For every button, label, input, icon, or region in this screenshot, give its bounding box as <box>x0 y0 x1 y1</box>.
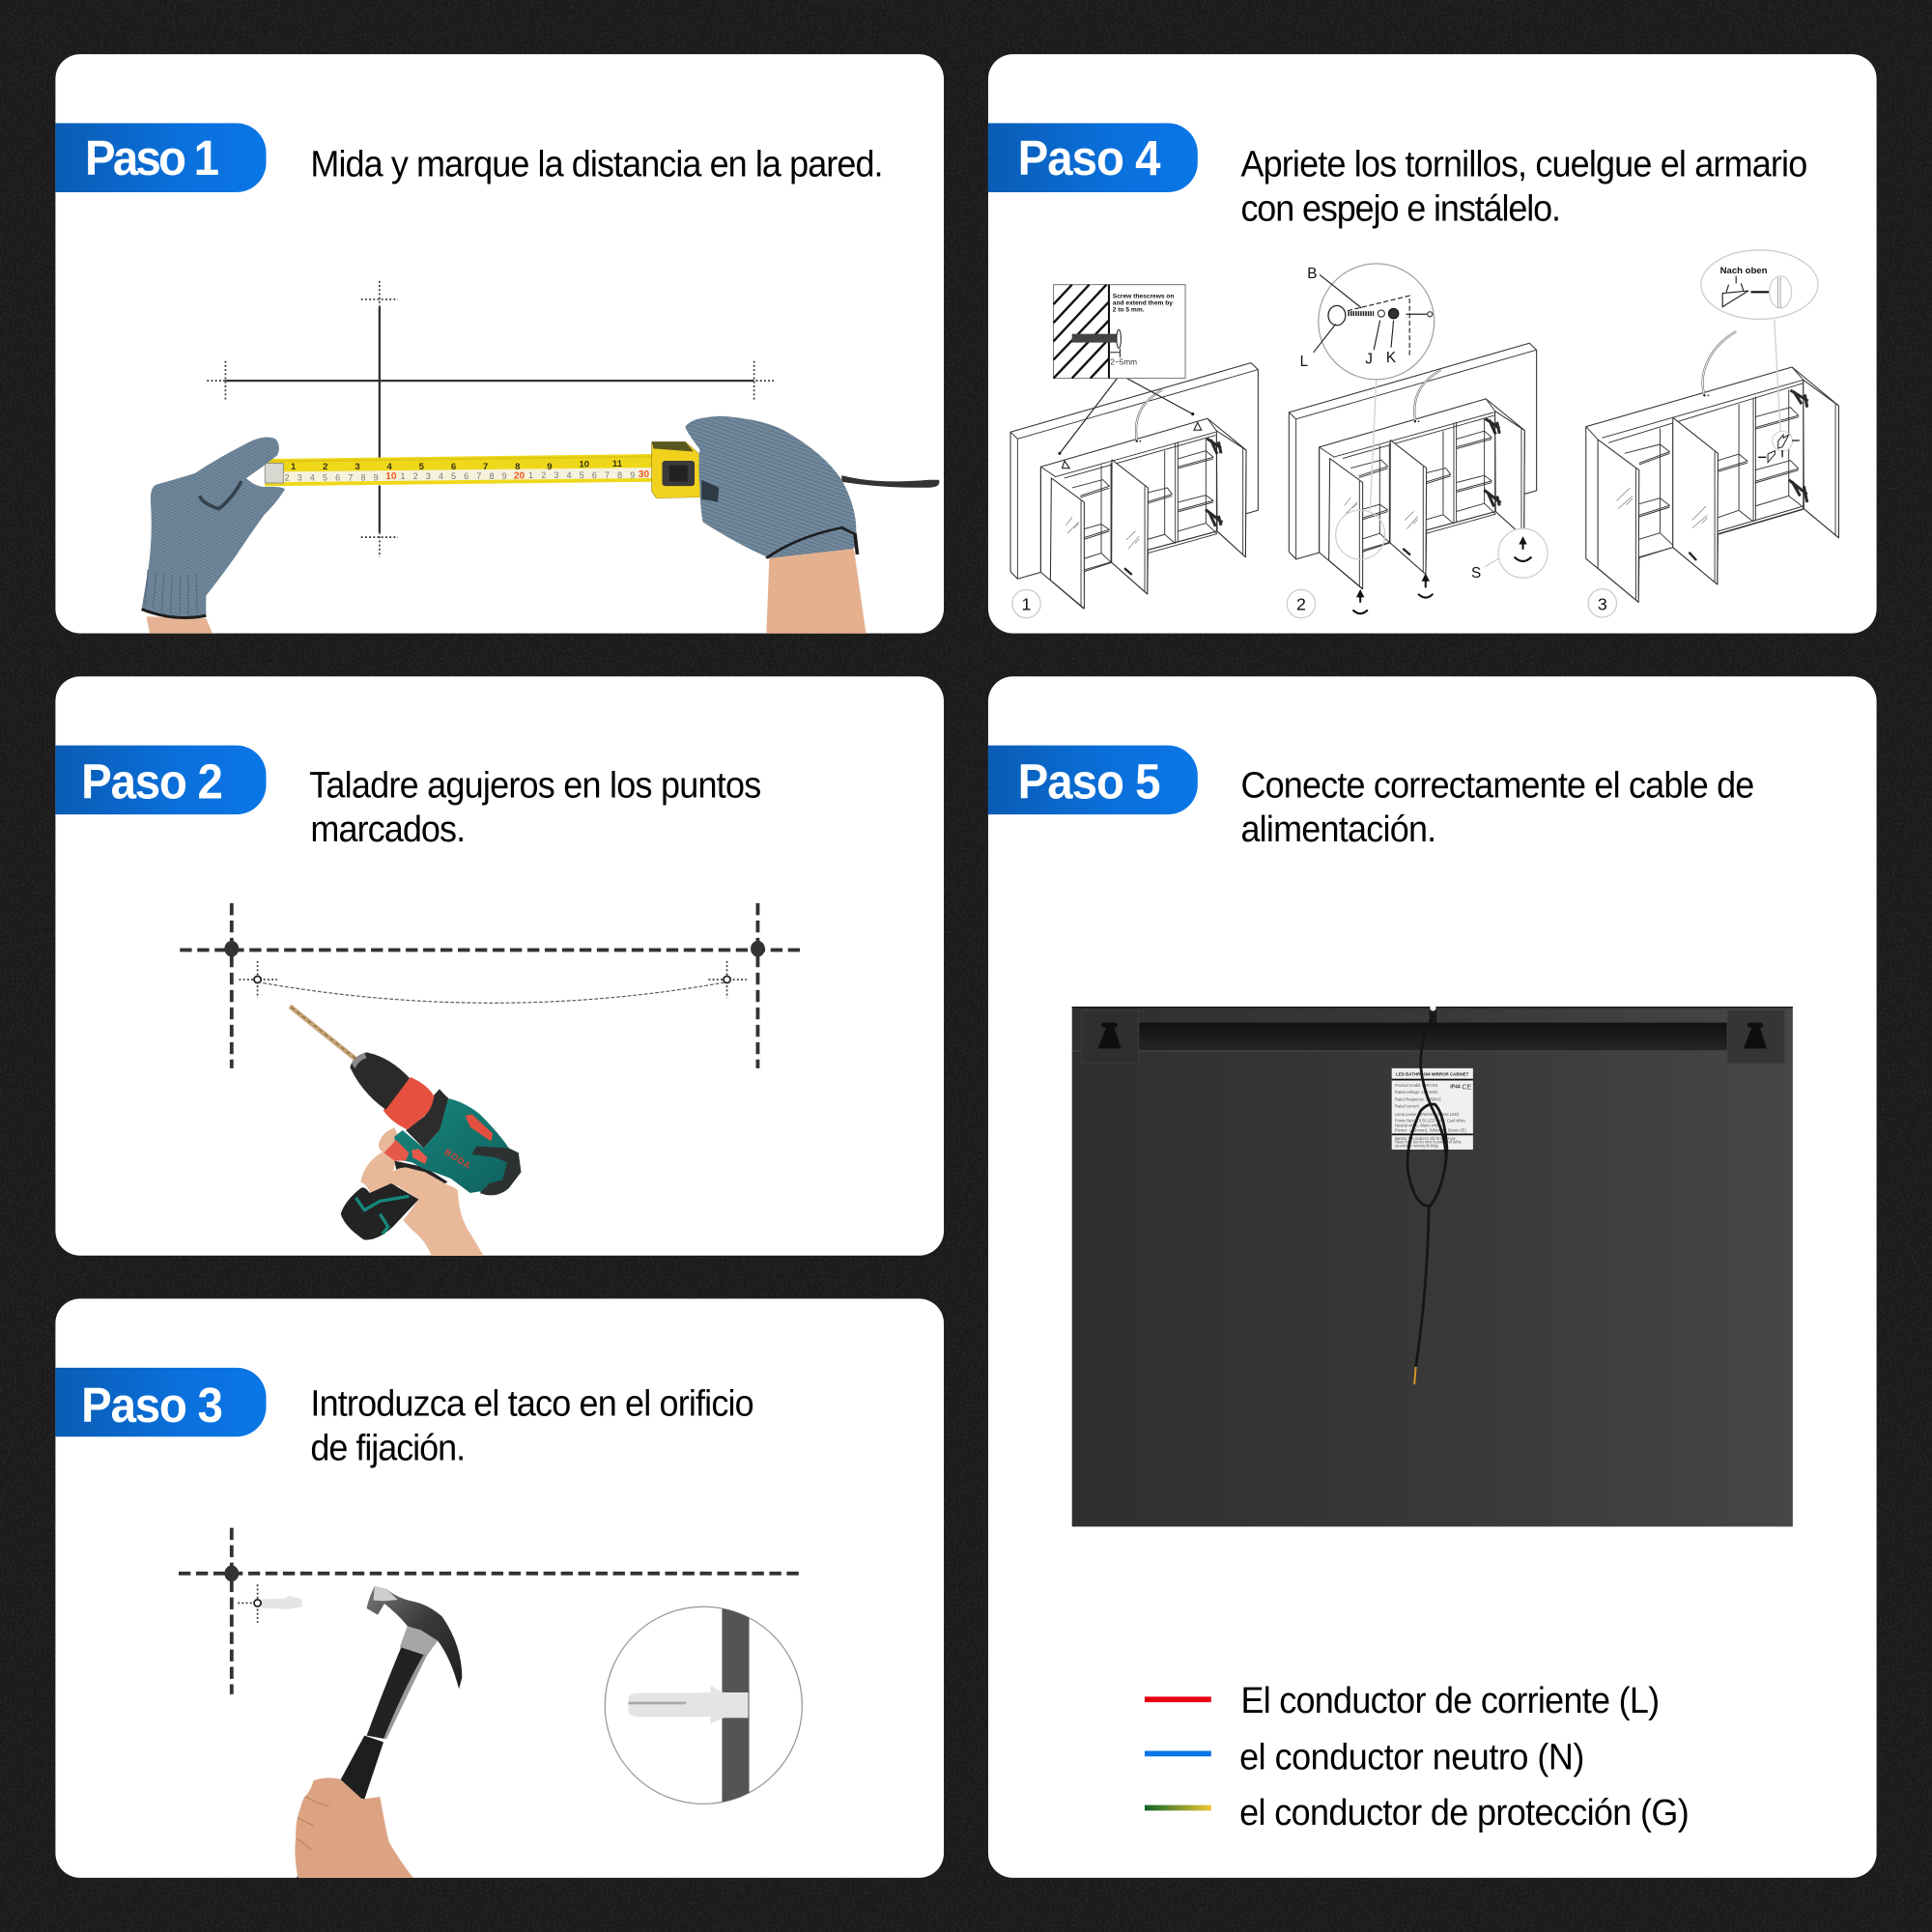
detail box: screw depth: and extend them by <box>1113 300 1173 307</box>
detail circle: fittings: L <box>1300 354 1308 370</box>
detail circle: fittings: K <box>1386 350 1397 366</box>
label: rating plate: Neutral white, Warm white <box>1395 1122 1441 1127</box>
detail box: screw depth: 2~5mm <box>1110 357 1137 367</box>
illustration: left gloved hand <box>142 438 285 634</box>
label: rating plate <box>1392 1068 1473 1150</box>
number 1 <box>1012 589 1040 618</box>
diagram: drill marking lines <box>180 903 801 1068</box>
detail box: screw depth <box>1054 285 1185 379</box>
text: step 3 instruction: de fijación. <box>310 1426 466 1468</box>
text: step 2 instruction: Taladre agujeros en los puntos <box>309 763 761 805</box>
badge: Paso 1 <box>55 124 267 192</box>
badge: Paso 4: Paso 4 <box>1018 131 1161 186</box>
illustration: measuring tape: 10 <box>579 459 589 469</box>
text: step 3 instruction: Introduzca el taco en el orificio <box>310 1382 754 1424</box>
badge: Paso 2 <box>55 746 267 814</box>
number 2 <box>1287 589 1316 618</box>
badge: Paso 5: Paso 5 <box>1018 754 1160 810</box>
diagram: cabinet 1 <box>1010 285 1258 618</box>
diagram: cabinet 2 <box>1287 264 1548 618</box>
diagram: anchor marking lines <box>179 1528 800 1694</box>
bracket: left <box>1082 1010 1139 1064</box>
illustration: drill in hand <box>290 1007 521 1256</box>
badge: Paso 5 <box>988 746 1198 814</box>
illustration: measuring tape: 23456789 <box>285 472 379 482</box>
label: rating plate: Lamp power: 30W/60W (Class LED) <box>1395 1112 1460 1117</box>
detail circle: wall anchor <box>605 1602 802 1811</box>
label: rating plate: CE <box>1462 1085 1471 1092</box>
badge: Paso 3 <box>55 1368 267 1436</box>
diagram: cabinet 2: S <box>1471 565 1481 582</box>
illustration: measuring tape <box>265 454 653 486</box>
text: step 5 instruction: alimentación. <box>1240 808 1436 849</box>
panel: Paso 1 <box>55 54 944 634</box>
legend <box>1145 1679 1690 1833</box>
panel: Paso 2 <box>55 676 944 1256</box>
text: step 5 instruction <box>1240 763 1754 849</box>
photo: cabinet back panel <box>1072 1005 1793 1526</box>
badge: Paso 2: Paso 2 <box>81 754 223 810</box>
detail ellipse: Nach oben: Nach oben <box>1720 266 1768 276</box>
panel: Paso 3 <box>55 1298 944 1878</box>
number 3: 3 <box>1598 594 1607 613</box>
panel: Paso 5 <box>988 676 1877 1878</box>
text: step 5 instruction: Conecte correctamente el cable de <box>1240 763 1754 805</box>
detail circle: fittings: J <box>1365 351 1373 367</box>
arrows: adjusting feet <box>1353 538 1531 613</box>
number 1: 1 <box>1022 594 1032 613</box>
label: rating plate: Product model: BMC018 <box>1395 1083 1438 1088</box>
label: rating plate: Power: L (Brown), White, N, Green (E) <box>1395 1128 1467 1133</box>
label: rating plate: Rated voltage: 110-265V <box>1395 1090 1438 1094</box>
illustration: hammer in hand <box>295 1586 462 1878</box>
label: rating plate: Rated current: <box>1395 1104 1420 1109</box>
label: rating plate: Rated frequency: 50/60HZ <box>1395 1097 1441 1102</box>
illustration: measuring tape: 20 <box>514 471 526 482</box>
illustration: measuring tape: 123456789 <box>528 470 635 480</box>
detail ellipse: Nach oben <box>1701 250 1818 319</box>
detail box: screw depth: 2 to 5 mm. <box>1113 307 1145 314</box>
label: rating plate: IP44 <box>1450 1084 1461 1090</box>
illustration: measuring tape: 11 <box>612 459 623 469</box>
text: step 4 instruction: Apriete los tornillos, cuelgue el armario <box>1240 142 1807 185</box>
badge: Paso 1: Paso 1 <box>85 131 219 186</box>
legend: live wire: El conductor de corriente (L) <box>1240 1679 1660 1720</box>
panel: Paso 4 <box>988 54 1877 634</box>
illustration: measuring tape: 30 <box>639 469 649 480</box>
text: step 2 instruction: marcados. <box>310 808 466 849</box>
illustration: measuring tape: 123456789 <box>401 471 507 481</box>
text: step 3 instruction <box>310 1382 754 1468</box>
text: step 2 instruction <box>309 763 761 849</box>
label: rating plate: Power factor: 0.55 LED color: Cool white, <box>1395 1118 1466 1122</box>
detail circle: fittings: B <box>1307 266 1318 282</box>
text: step 1 instruction: Mida y marque la distancia en la pared. <box>310 142 884 185</box>
illustration: right gloved hand and arm <box>652 416 939 634</box>
illustration: measuring tape: 10 <box>385 471 397 482</box>
illustration: drill in hand: BODA <box>442 1147 472 1171</box>
number 3 <box>1588 589 1616 617</box>
cable <box>1407 1016 1447 1384</box>
bracket: right <box>1727 1010 1784 1064</box>
diagram: cabinet 3 <box>1586 250 1838 617</box>
text: step 4 instruction <box>1240 142 1807 229</box>
label: rating plate: Please make sure the mirror is powered off before <box>1395 1140 1462 1145</box>
badge: Paso 3: Paso 3 <box>81 1378 223 1433</box>
detail box: screw depth: Screw thescrews on <box>1113 294 1174 300</box>
label: rating plate: use and when removing the bridge. <box>1395 1143 1439 1148</box>
number 2: 2 <box>1296 594 1306 613</box>
legend: ground wire: el conductor de protección (G) <box>1239 1791 1690 1833</box>
text: step 4 instruction: con espejo e instálelo. <box>1240 186 1561 229</box>
label: rating plate: Warning: This product is only for indoor use. <box>1395 1136 1457 1141</box>
label: rating plate: LED BATHROOM MIRROR CABINET <box>1396 1072 1468 1078</box>
legend: neutral wire: el conductor neutro (N) <box>1239 1736 1584 1777</box>
diagram: measurement cross lines <box>207 281 774 557</box>
illustration: measuring tape: 123456789 <box>291 462 553 472</box>
detail circle: fittings <box>1300 264 1435 380</box>
badge: Paso 4 <box>988 124 1198 192</box>
